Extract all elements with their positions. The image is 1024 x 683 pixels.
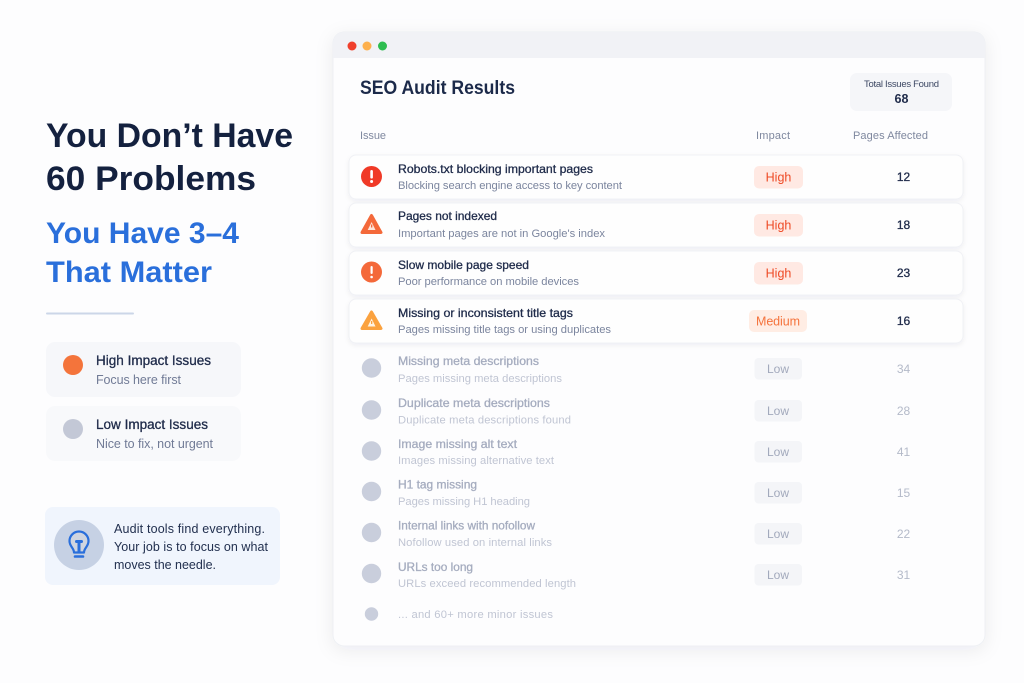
row: internal links nofollow: 22 — [897, 527, 910, 541]
legend: high impact issues: Focus here first — [96, 373, 182, 387]
row: duplicate meta descriptions: Duplicate meta descriptions found — [398, 414, 571, 426]
table column headers: Pages Affected — [853, 130, 928, 142]
panel title: SEO Audit Results — [360, 77, 515, 99]
row: image alt text: Images missing alternative text — [398, 455, 555, 467]
legend: high impact issues: High Impact Issues — [96, 353, 211, 368]
row: image alt text: Image missing alt text — [398, 437, 518, 451]
callout: focus tip: Your job is to focus on what — [114, 540, 269, 554]
window title bar — [333, 32, 985, 58]
legend: low impact issues: Nice to fix, not urgent — [96, 437, 214, 451]
row: more minor issues: ... and 60+ more minor issues — [398, 609, 553, 621]
row: duplicate meta descriptions: 28 — [897, 404, 910, 418]
total issues box — [850, 73, 952, 111]
row: pages not indexed — [349, 203, 963, 247]
total issues box: Total Issues Found — [864, 79, 939, 90]
row: urls too long: Low — [767, 568, 789, 582]
row: missing meta descriptions — [362, 354, 910, 385]
row: title tags — [349, 299, 963, 343]
legend: high impact issues — [46, 342, 241, 397]
table column headers: Issue — [360, 130, 386, 142]
icon: orange alert — [361, 262, 382, 282]
row: internal links nofollow: Nofollow used on internal links — [398, 537, 552, 549]
heading: you don't have 60 problems: You Don’t Have — [46, 117, 293, 155]
row: h1 tag missing: Low — [767, 486, 789, 500]
row: internal links nofollow: Internal links with nofollow — [398, 518, 535, 532]
callout: focus tip — [45, 507, 280, 585]
callout: focus tip: Audit tools find everything. — [114, 522, 265, 536]
row: robots.txt: Robots.txt blocking important pages — [398, 162, 593, 176]
row: image alt text: Low — [767, 445, 789, 459]
row: duplicate meta descriptions: Low — [767, 404, 789, 418]
icon: light bulb — [70, 532, 88, 556]
row: image alt text — [362, 437, 910, 467]
total issues box: 68 — [895, 92, 908, 106]
legend: low impact issues — [46, 406, 241, 461]
icon: red alert — [361, 166, 382, 187]
row: duplicate meta descriptions: Duplicate meta descriptions — [398, 396, 550, 410]
row: pages not indexed: Important pages are not in Google's index — [398, 228, 605, 240]
panel: audit results window — [333, 32, 985, 646]
row: pages not indexed: 18 — [897, 218, 910, 232]
table column headers — [360, 130, 928, 142]
row: h1 tag missing: H1 tag missing — [398, 478, 477, 492]
left column: headline and legend — [46, 117, 293, 461]
row: internal links nofollow: Low — [767, 527, 789, 541]
heading: you don't have 60 problems — [46, 117, 293, 198]
heading: you don't have 60 problems: 60 Problems — [46, 160, 256, 198]
row: pages not indexed: Pages not indexed — [398, 209, 497, 223]
row: title tags: Missing or inconsistent title tags — [398, 306, 573, 320]
icon: orange warning — [362, 216, 381, 232]
row: h1 tag missing: Pages missing H1 heading — [398, 496, 530, 508]
legend: low impact issues: Low Impact Issues — [96, 417, 208, 432]
table column headers: Impact — [756, 130, 790, 142]
row: missing meta descriptions: Missing meta descriptions — [398, 354, 539, 368]
row: title tags: 16 — [897, 314, 910, 328]
icon: amber warning — [362, 312, 381, 328]
row: urls too long — [362, 560, 910, 590]
row: urls too long: URLs too long — [398, 560, 473, 574]
row: missing meta descriptions: 34 — [897, 362, 910, 376]
row: slow mobile page speed: 23 — [897, 266, 910, 280]
subheading: you have 3-4 that matter — [46, 217, 239, 289]
row: internal links nofollow — [362, 518, 910, 549]
row: missing meta descriptions: Pages missing meta descriptions — [398, 373, 562, 385]
row: robots.txt: High — [766, 170, 791, 184]
row: duplicate meta descriptions — [362, 396, 910, 426]
row: pages not indexed: High — [766, 218, 791, 232]
row: missing meta descriptions: Low — [767, 362, 789, 376]
row: title tags: Medium — [756, 314, 800, 328]
row: image alt text: 41 — [897, 445, 910, 459]
subheading: you have 3-4 that matter: That Matter — [46, 256, 212, 289]
row: slow mobile page speed: High — [766, 266, 791, 280]
row: slow mobile page speed: Slow mobile page speed — [398, 258, 529, 272]
row: robots.txt: Blocking search engine access to key content — [398, 180, 623, 192]
row: h1 tag missing — [362, 478, 910, 508]
row: h1 tag missing: 15 — [897, 486, 910, 500]
row: slow mobile page speed — [349, 251, 963, 295]
row: urls too long: URLs exceed recommended length — [398, 578, 576, 590]
row: robots.txt: 12 — [897, 170, 910, 184]
subheading: you have 3-4 that matter: You Have 3–4 — [46, 217, 239, 250]
row: urls too long: 31 — [897, 568, 910, 582]
row: title tags: Pages missing title tags or using duplicates — [398, 324, 611, 336]
row: robots.txt — [349, 155, 963, 199]
callout: focus tip: moves the needle. — [114, 558, 216, 572]
row: slow mobile page speed: Poor performance on mobile devices — [398, 276, 579, 288]
